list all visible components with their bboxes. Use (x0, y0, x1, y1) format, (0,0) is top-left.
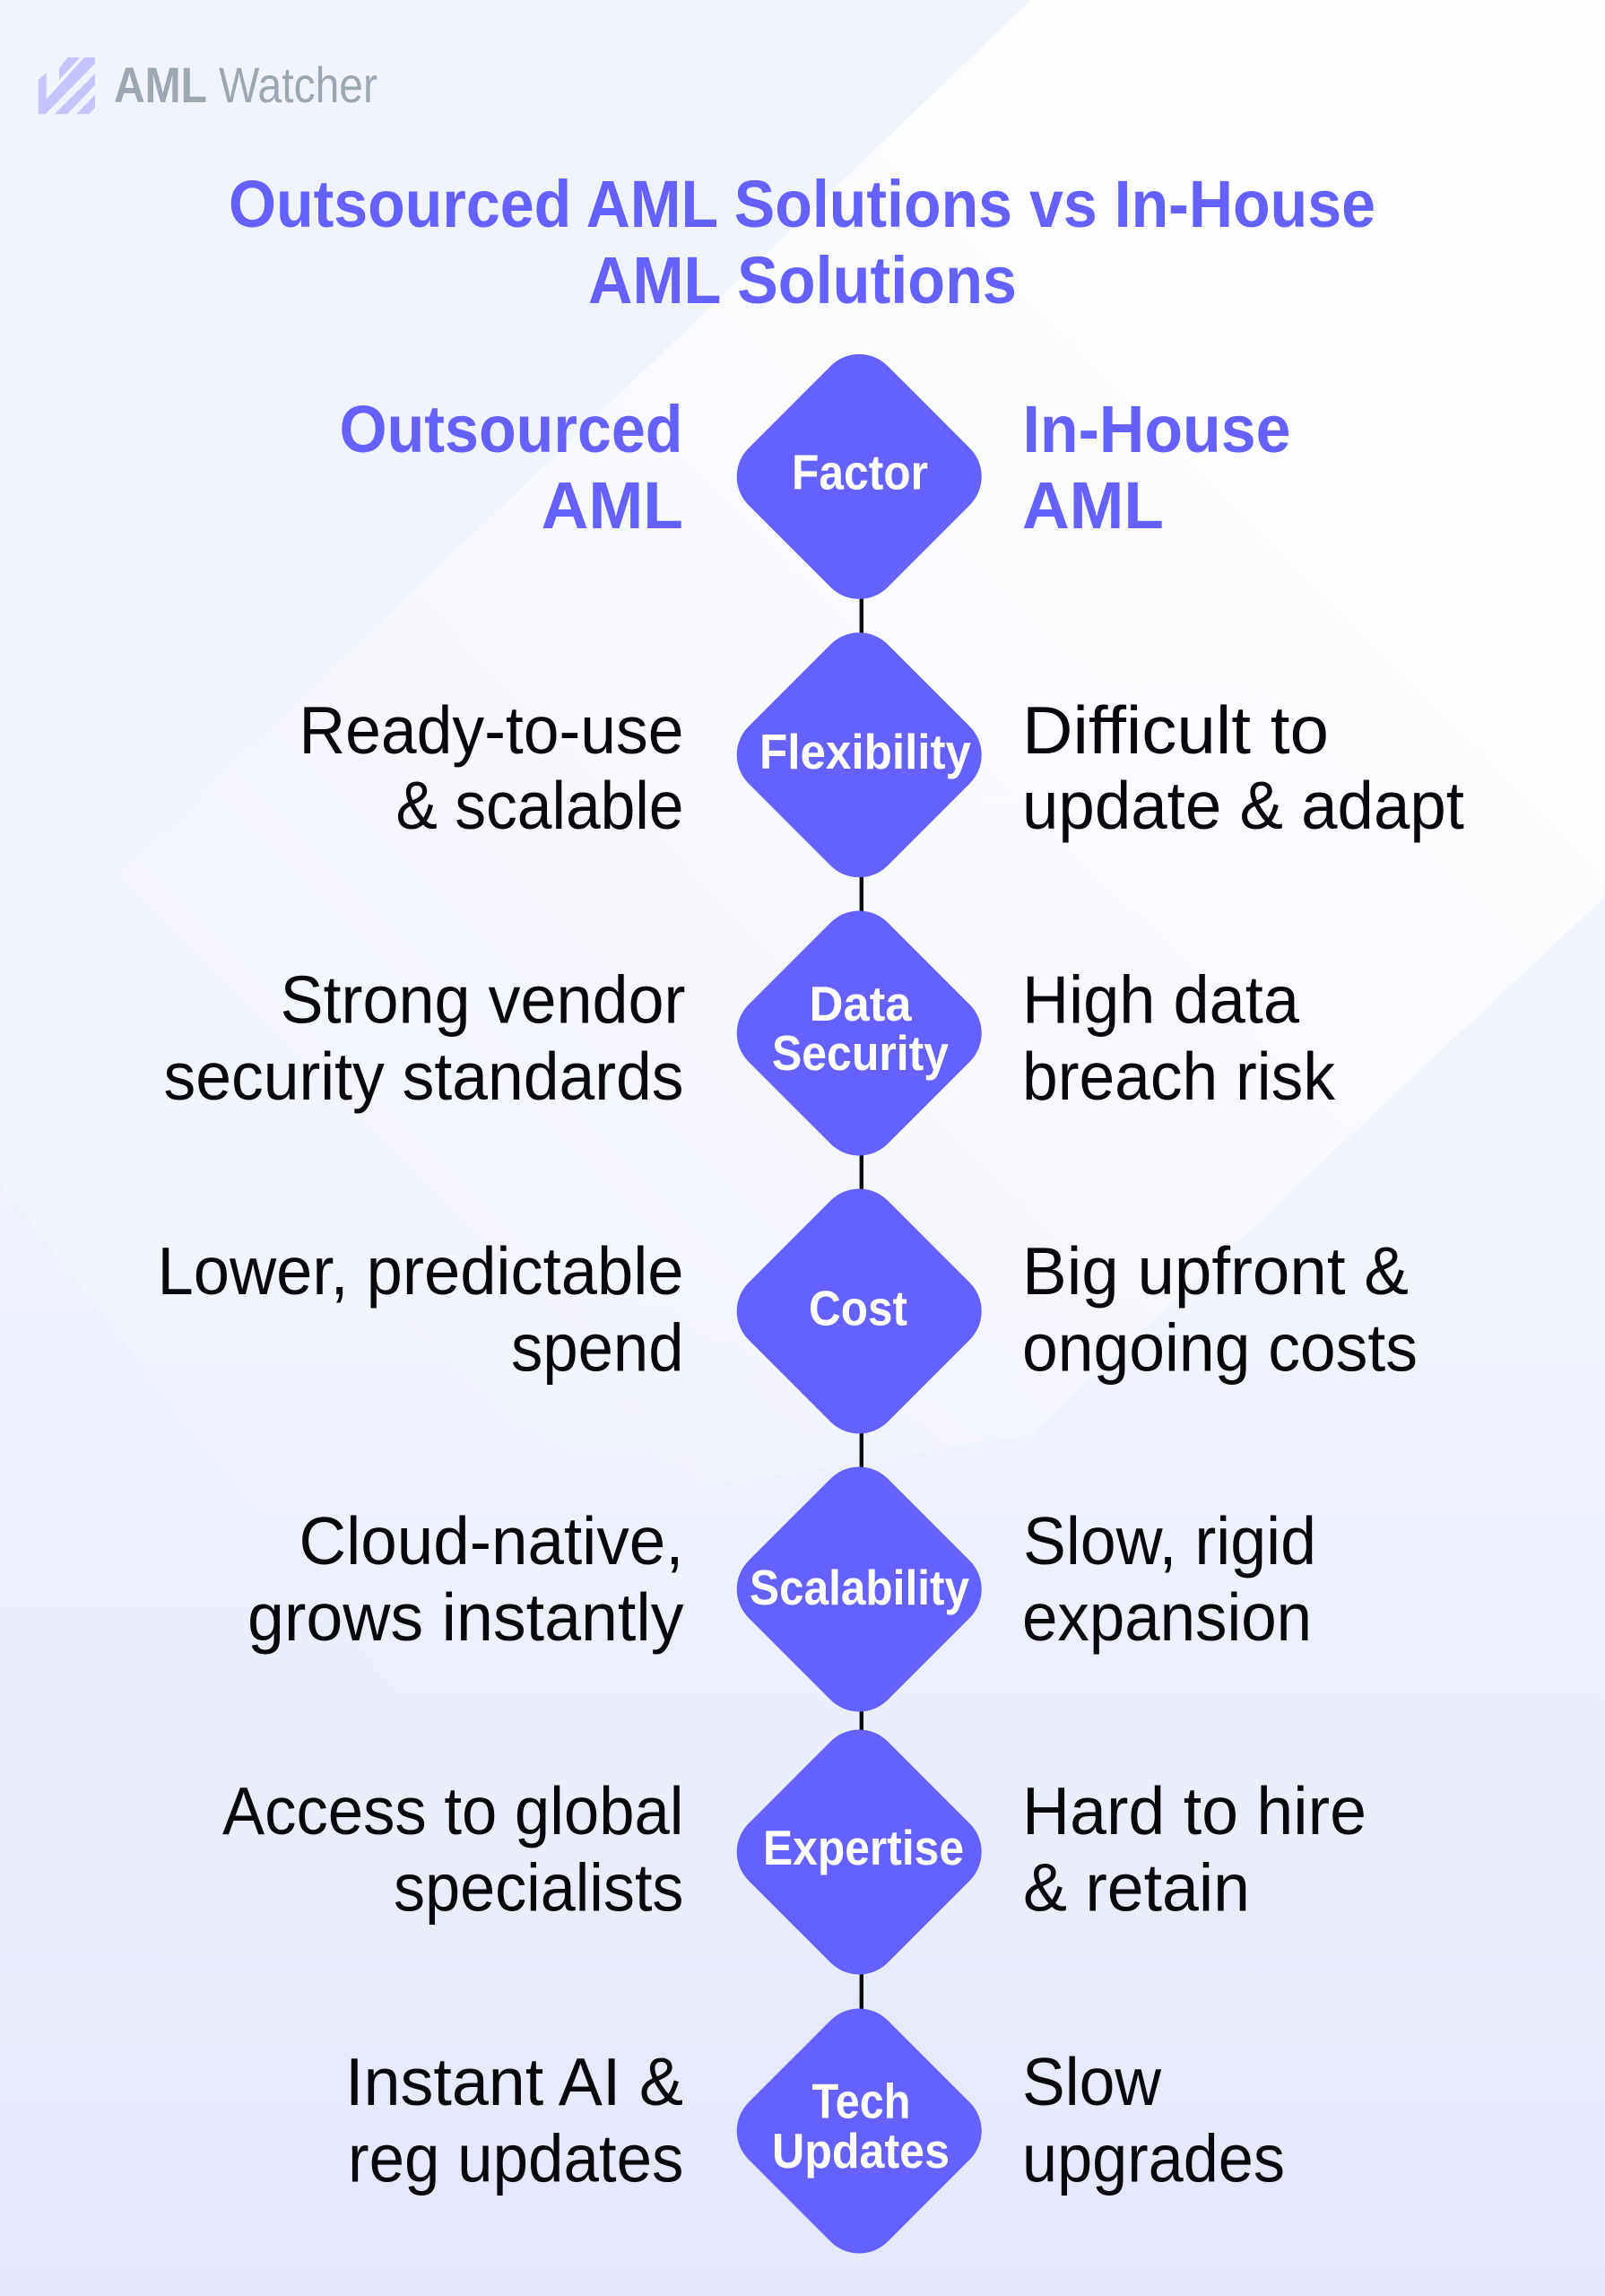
outsourced text: specialists (394, 1849, 683, 1925)
outsourced text: Lower, predictable (158, 1233, 683, 1309)
column heading: In-House AML: AML (1022, 468, 1164, 543)
connector line (860, 592, 863, 2027)
in-house text: Slow, rigid (1023, 1503, 1316, 1578)
row: Data Security (163, 894, 1335, 1172)
diamond: Data Security: Security (772, 1025, 949, 1081)
diamond: Cost (720, 1172, 998, 1450)
diamond: Data Security: Data (809, 976, 912, 1031)
diamond: Expertise: Expertise (763, 1820, 964, 1875)
row: Tech Updates (345, 1992, 1285, 2270)
diamond: Data Security (720, 894, 998, 1172)
column heading: In-House AML: In-House (1022, 392, 1291, 466)
in-house text: ongoing costs (1022, 1309, 1418, 1385)
icon: striped check mark (39, 57, 95, 114)
diamond: Flexibility (720, 616, 998, 894)
outsourced text: grows instantly (247, 1579, 684, 1655)
outsourced text: Instant AI & (345, 2044, 683, 2119)
diamond: Tech Updates: Updates (772, 2123, 950, 2179)
diamond: Tech Updates: Tech (812, 2074, 911, 2129)
logo wordmark: AML (114, 57, 207, 113)
diamond: Factor (720, 337, 998, 616)
outsourced text: & scalable (396, 768, 683, 843)
outsourced text: Access to global (222, 1773, 683, 1848)
in-house text: upgrades (1022, 2120, 1285, 2196)
in-house text: expansion (1022, 1579, 1312, 1655)
diamond: Expertise (720, 1713, 998, 1991)
logo wordmark: Watcher (219, 57, 377, 113)
in-house text: Big upfront & (1022, 1233, 1409, 1309)
in-house text: update & adapt (1022, 768, 1464, 843)
in-house text: & retain (1023, 1849, 1250, 1925)
in-house text: Slow (1022, 2044, 1162, 2119)
column heading: Outsourced AML: Outsourced (339, 392, 683, 466)
diamond: Factor: Factor (792, 445, 928, 500)
diamond: Flexibility: Flexibility (759, 724, 971, 779)
column heading: Outsourced AML: AML (542, 468, 683, 543)
outsourced text: Ready-to-use (299, 692, 683, 768)
in-house text: Hard to hire (1022, 1773, 1366, 1848)
row: Scalability (247, 1450, 1316, 1728)
in-house text: High data (1022, 961, 1299, 1037)
in-house text: breach risk (1022, 1039, 1335, 1114)
diamond: Tech Updates (720, 1992, 998, 2270)
row: header (339, 337, 1291, 616)
diamond: Cost: Cost (809, 1281, 907, 1336)
in-house text: Difficult to (1022, 692, 1329, 768)
outsourced text: Strong vendor (280, 961, 685, 1037)
outsourced text: security standards (163, 1039, 683, 1114)
outsourced text: spend (511, 1309, 683, 1385)
diamond: Scalability (720, 1450, 998, 1728)
row: Flexibility (299, 616, 1464, 894)
title: Outsourced AML Solutions vs In-House (229, 167, 1375, 241)
outsourced text: reg updates (348, 2120, 683, 2196)
row: Expertise (222, 1713, 1366, 1991)
diamond: Scalability: Scalability (750, 1560, 969, 1615)
row: Cost (158, 1172, 1418, 1450)
title: AML Solutions (588, 243, 1017, 317)
outsourced text: Cloud-native, (299, 1503, 683, 1578)
logo: AML Watcher (39, 57, 377, 114)
